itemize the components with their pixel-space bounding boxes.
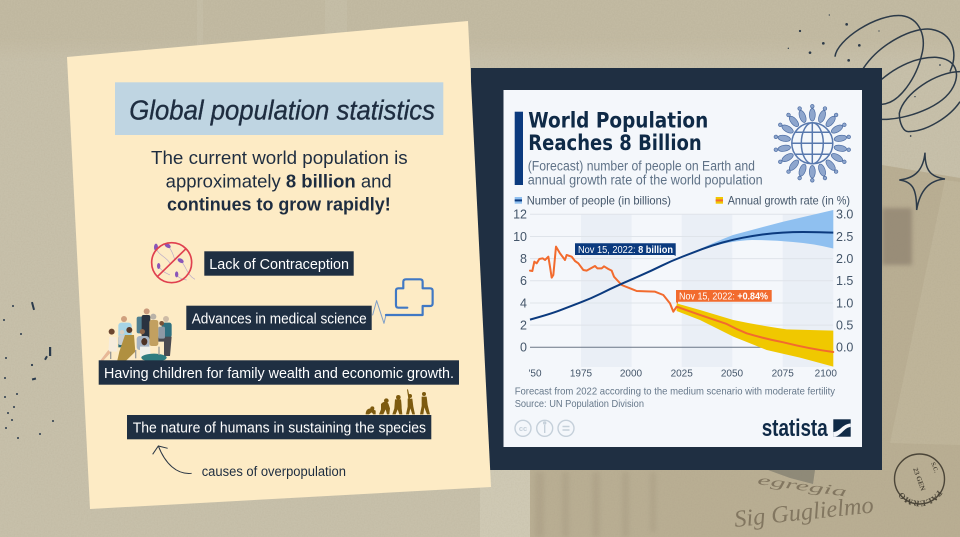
left axis labels bbox=[513, 208, 527, 355]
intro text: The current world population is bbox=[151, 148, 408, 168]
postmark stamp: 23 GEN bbox=[911, 467, 927, 492]
right axis labels: 2.0 bbox=[836, 252, 853, 266]
forecast band: population bbox=[700, 210, 833, 249]
postmark stamp bbox=[894, 453, 946, 506]
right axis labels: 1.0 bbox=[836, 296, 853, 310]
x axis labels: 2025 bbox=[671, 368, 693, 379]
right axis labels: 2.5 bbox=[836, 230, 853, 244]
heading band bbox=[115, 82, 443, 135]
left axis labels: 12 bbox=[513, 208, 527, 222]
x axis labels: 2000 bbox=[620, 368, 643, 379]
intro text bbox=[151, 148, 408, 215]
tag: nature of humans bbox=[127, 415, 431, 439]
decorative specks left bbox=[3, 302, 54, 439]
left axis labels: 2 bbox=[520, 318, 527, 332]
postmark stamp: S.C. bbox=[929, 462, 939, 474]
tag: nature of humans: The nature of humans in sustaining the species bbox=[133, 421, 426, 437]
left axis labels: 6 bbox=[520, 274, 527, 288]
x axis labels: 2100 bbox=[815, 368, 837, 379]
chart card bbox=[504, 90, 862, 447]
chart title accent bar bbox=[515, 112, 523, 185]
callout: +0.84%: Nov 15, 2022: +0.84% bbox=[679, 291, 769, 303]
line: population bbox=[530, 232, 833, 320]
left axis labels: 0 bbox=[520, 341, 527, 355]
icon: no contraception symbol bbox=[152, 242, 195, 283]
right axis labels: 1.5 bbox=[836, 274, 853, 288]
x axis labels: 2075 bbox=[772, 368, 794, 379]
icon: globe surrounded by people bbox=[774, 104, 851, 182]
tag: lack of contraception bbox=[204, 251, 354, 276]
statista logo: statista bbox=[762, 415, 828, 442]
background: aged paper and envelopes: Sig Guglielmo bbox=[733, 492, 875, 533]
right axis labels bbox=[836, 208, 853, 355]
chart title: World Population bbox=[528, 108, 708, 132]
tag: advances in medical science: Advances in medical science bbox=[192, 311, 367, 327]
right axis labels: 3.0 bbox=[836, 208, 853, 222]
left axis labels: 10 bbox=[513, 230, 527, 244]
icon: medical cross with pulse bbox=[373, 279, 433, 323]
icon: family group bbox=[98, 308, 172, 363]
x axis labels: 1975 bbox=[570, 368, 593, 379]
tag: having children: Having children for family wealth and economic growth. bbox=[104, 366, 454, 382]
postmark stamp: PALERMO bbox=[899, 490, 942, 506]
icons: creative commons: cc bbox=[519, 424, 527, 433]
line chart bbox=[513, 208, 853, 379]
decorative scribble top right bbox=[788, 14, 960, 210]
intro text: approximately 8 billion and bbox=[166, 171, 392, 191]
source note bbox=[515, 386, 836, 410]
legend: number of people: Number of people (in billions) bbox=[527, 193, 671, 207]
forecast band: growth rate bbox=[677, 303, 833, 367]
chart title: Reaches 8 Billion bbox=[528, 131, 702, 155]
tag: having children bbox=[99, 360, 459, 385]
tag: advances in medical science bbox=[186, 306, 372, 330]
left axis labels: 4 bbox=[520, 296, 527, 310]
callout: 8 billion: Nov 15, 2022: 8 billion bbox=[578, 244, 673, 256]
tag: lack of contraception: Lack of Contraception bbox=[209, 257, 349, 273]
heading: Global population statistics bbox=[129, 94, 435, 125]
right axis labels: 0.0 bbox=[836, 341, 853, 355]
line: growth rate bbox=[530, 247, 833, 352]
icon: human evolution silhouettes bbox=[366, 389, 430, 414]
chart subtitle: annual growth rate of the world population bbox=[528, 172, 763, 187]
x axis labels: 2050 bbox=[721, 368, 744, 379]
chart title bbox=[528, 108, 708, 155]
right axis labels: 0.5 bbox=[836, 318, 853, 332]
legend: annual growth rate: Annual growth rate (in %) bbox=[728, 193, 850, 207]
caption: causes of overpopulation bbox=[202, 464, 346, 479]
source note: Source: UN Population Division bbox=[515, 399, 644, 410]
panel: statista chart frame bbox=[471, 68, 882, 470]
arrow bbox=[153, 446, 192, 473]
panel: notes paper bbox=[67, 21, 491, 509]
x axis labels: '50 bbox=[528, 368, 542, 379]
chart subtitle bbox=[528, 158, 763, 187]
intro text: continues to grow rapidly! bbox=[167, 195, 391, 215]
x axis labels bbox=[528, 368, 837, 379]
icons: creative commons bbox=[515, 420, 574, 436]
left axis labels: 8 bbox=[520, 252, 527, 266]
background: aged paper and envelopes: egregia bbox=[756, 473, 848, 500]
chart subtitle: (Forecast) number of people on Earth and bbox=[528, 158, 755, 173]
source note: Forecast from 2022 according to the medium scenario with moderate fertility bbox=[515, 386, 836, 397]
